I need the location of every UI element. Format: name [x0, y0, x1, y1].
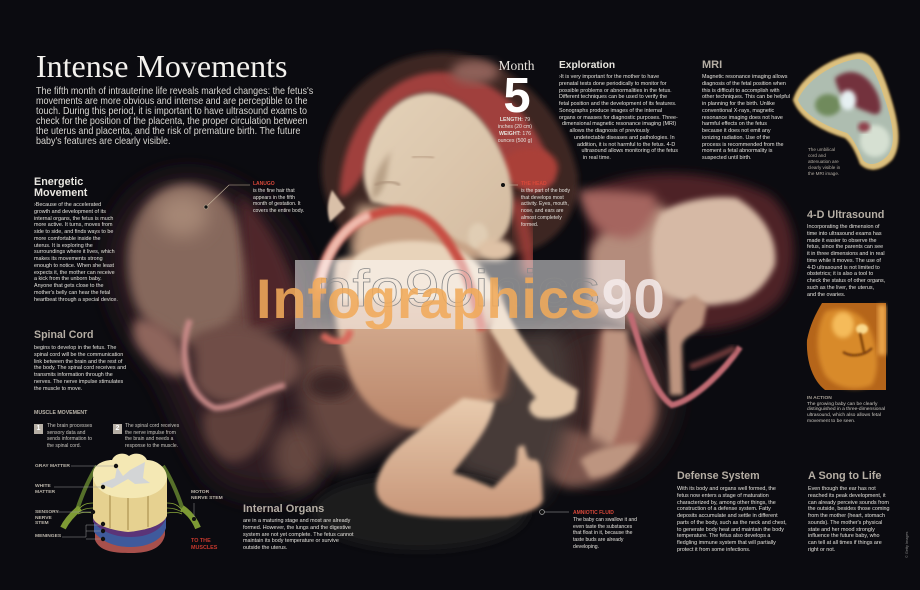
text: THE HEAD [521, 181, 547, 187]
label: to the muscles [191, 538, 218, 551]
body text: uterus. It is exploring the [34, 242, 93, 248]
text: covers the entire body. [253, 208, 304, 214]
body text: in real time. [583, 155, 611, 161]
text: appears in the fifth [253, 194, 295, 200]
body text: resonance imaging does not have [702, 114, 783, 120]
ultrasound caption: distinguished in a three-dimensional [807, 407, 885, 412]
body text: system are not yet complete. The fetus cannot [243, 532, 353, 538]
text: formed. [521, 222, 538, 228]
heading: 4-D Ultrasound [807, 209, 884, 221]
body text: obstetrics; it is also a tool to [807, 271, 873, 277]
label: white matter: WHITE [35, 484, 51, 489]
body text: such as the liver, the uterus, [807, 285, 874, 291]
body text: in planning for the birth. Unlike [702, 101, 775, 107]
body text: transmits information through the [34, 372, 113, 378]
body text [559, 74, 678, 161]
leader lines [54, 466, 194, 539]
body text: makes its movements strong [34, 256, 103, 262]
body text: Different techniques can be used to verify the [559, 94, 667, 100]
body text: more comfortable inside the [34, 236, 101, 242]
body text: this is difficult to accomplish with [702, 88, 780, 94]
step text: the brain and needs a [125, 436, 173, 442]
body text [702, 74, 790, 161]
body text [243, 518, 354, 551]
step text [47, 423, 92, 449]
label: white matter: MATTER [35, 490, 55, 495]
step 1 [34, 423, 92, 449]
body text: right or not. [808, 547, 835, 553]
panel: exploration [559, 60, 678, 161]
body text: maintain its body temperature or survive [243, 538, 339, 544]
label: motor nerve stem: NERVE STEM [191, 496, 223, 501]
ultrasound caption: movement to be seen. [807, 419, 855, 424]
step text [125, 423, 180, 449]
body text: spinal cord will be the communication [34, 352, 123, 358]
intro paragraph: touch. During this period, it is important to have ultrasound exams to [36, 106, 307, 117]
label: motor nerve stem: MOTOR [191, 490, 209, 495]
white matter column [93, 478, 167, 532]
text: almost completely [521, 215, 562, 221]
body text [808, 486, 890, 553]
body text: time into ultrasound exams has [807, 231, 882, 237]
watermark text: Infographics90 [256, 267, 666, 330]
measurements: WEIGHT: 176 [499, 131, 531, 137]
markers [114, 464, 118, 468]
intro paragraph: movements are more obvious and intense and are perceptible to the [36, 96, 308, 107]
body text: the muscle to move. [34, 386, 82, 392]
watermark band [295, 260, 625, 329]
body text: and the ovaries. [807, 292, 845, 298]
MRI caption: The umbilical [808, 147, 835, 152]
intro paragraph: baby's features are clearly visible. [36, 136, 170, 147]
body text: characterized by, among other things, the [677, 500, 776, 506]
MRI caption: the MRI image. [808, 171, 839, 176]
body text: sounds). The mother's physical [808, 520, 882, 526]
body text: diagnosis of the fetal position when [702, 81, 786, 87]
step text: response to the muscle. [125, 443, 178, 449]
right fetus [530, 174, 794, 487]
body text: link between the brain and the rest of [34, 358, 122, 364]
text: LANUGO [253, 181, 275, 187]
panel: a song to life [808, 470, 890, 553]
intro paragraph: check for the position of the placenta, the proper circulation between [36, 116, 308, 127]
body text: reached its peak development, it [808, 493, 886, 499]
body text: fledgling immune system that will partially [677, 540, 776, 546]
body text: it in three dimensions and in real [807, 251, 885, 257]
body text: can already perceive sounds from [808, 500, 889, 506]
ultrasound caption: IN ACTION [807, 396, 832, 401]
heading: Internal Organs [243, 503, 324, 515]
body text: time while it moves. The use of [807, 258, 881, 264]
body text: Anyone that gets close to the [34, 283, 104, 289]
body text: possible problems or abnormalities in the fetus. [559, 88, 672, 94]
MRI caption: cord and [808, 153, 826, 158]
heading: muscle movement: MUSCLE MOVEMENT [34, 410, 87, 416]
body text: fetus now enters a stage of maturation [677, 493, 769, 499]
heading: Energetic [34, 176, 83, 188]
body text: ›It is very important for the mother to have [559, 74, 659, 80]
body text: conventional X-rays, magnetic [702, 108, 774, 114]
ultrasound caption: The growing baby can be clearly [807, 402, 877, 407]
body text: outside the uterus. [243, 545, 287, 551]
step text: the spinal cord. [47, 443, 81, 449]
measurements: LENGTH: 79 [500, 117, 530, 123]
panel: defense system [677, 470, 787, 553]
body text: heartbeat through a special device. [34, 296, 118, 302]
text: The baby can swallow it and [573, 517, 637, 523]
ultrasound caption [807, 396, 885, 424]
label: to the muscles: TO THE [191, 538, 211, 544]
intro paragraph [36, 86, 313, 147]
body text: Even though the ear has not [808, 486, 876, 492]
body text: begins to develop in the fetus. The [34, 345, 116, 351]
intro paragraph: the uterus and placenta, and the risk of premature birth. The future [36, 126, 300, 137]
label: to the muscles: MUSCLES [191, 545, 217, 551]
title: Intense Movements [36, 48, 288, 84]
body text: formed. However, the lungs and the digestive [243, 525, 351, 531]
body text: harmful effects on the fetus [702, 121, 767, 127]
body text: a kick from the unborn baby. [34, 276, 102, 282]
measurements [498, 117, 532, 144]
label: motor nerve stem [191, 490, 223, 501]
body text: side to side, and finds ways to be [34, 229, 113, 235]
label: sensory nerve stem: STEM [35, 521, 49, 526]
step text: The spinal cord receives [125, 423, 179, 429]
body text: made it easier to observe the [807, 238, 877, 244]
body text: surroundings where it lives, which [34, 249, 115, 255]
body text: nerves. The nerve impulse stimulates [34, 379, 123, 385]
body text: influence the future baby, who [808, 533, 880, 539]
nerve roots [63, 466, 198, 528]
MRI caption: attenuation are [808, 159, 839, 164]
month label: Month [498, 58, 534, 73]
measurements: inches (20 cm) [498, 124, 532, 130]
number 5: 5 [503, 69, 531, 123]
text: taste buds are already [573, 537, 623, 543]
heading: Exploration [559, 60, 615, 71]
heading: A Song to Life [808, 470, 881, 482]
panel: 4-D ultrasound [807, 209, 885, 298]
ultrasound caption: ultrasound, which also allows fetal [807, 413, 881, 418]
body text: fetal position and the development of its features. [559, 101, 676, 107]
body text: Sonographs produce images of the internal [559, 108, 662, 114]
MRI caption: clearly visible in [808, 165, 840, 170]
label: white matter [35, 484, 55, 495]
center fetus body [300, 93, 578, 550]
body text: undetectable diseases and pathologies. In [574, 135, 675, 141]
text: that float in it, because the [573, 530, 632, 536]
step text: sensory data and [47, 430, 85, 436]
body text: other techniques. This can be helpful [702, 94, 790, 100]
text: month of gestation. It [253, 201, 301, 207]
text: nose, and ears are [521, 208, 563, 214]
text: AMNIOTIC FLUID [573, 510, 614, 516]
body text: mother's belly can hear the fetal [34, 290, 110, 296]
body text: Magnetic resonance imaging allows [702, 74, 787, 80]
body text: process is recommended from the [702, 142, 784, 148]
credit: © Getty Images [905, 532, 909, 558]
body text: deposits accumulate and settle in different [677, 513, 778, 519]
body text: parts of the body, such as the neck and chest, [677, 520, 787, 526]
body text: state and her mood strongly [808, 526, 875, 532]
panel: energetic movement [34, 176, 118, 302]
body text [677, 486, 787, 553]
text: is the part of the body [521, 188, 570, 194]
body text: allows the diagnosis of previously [569, 128, 650, 134]
body text: temperature. The fetus also develops a [677, 533, 770, 539]
body text: check the status of other organs, [807, 278, 885, 284]
body text: Incorporating the dimension of [807, 224, 880, 230]
body text: the body. The spinal cord receives and [34, 365, 126, 371]
heading: Defense System [677, 470, 760, 482]
heading: MRI [702, 59, 722, 71]
text: that develops most [521, 194, 564, 200]
body text: the outside, besides those coming [808, 506, 890, 512]
body text: ionizing radiation. Use of the [702, 135, 770, 141]
step badge: 2 [116, 425, 119, 432]
text: developing. [573, 544, 599, 550]
body text [807, 224, 885, 298]
center fetus placenta halo [321, 53, 578, 275]
body text [34, 345, 126, 392]
step text: sends information to [47, 436, 92, 442]
left fetus [110, 176, 324, 494]
body text: addition, it is not harmful to the fetus. 4-D [577, 142, 675, 148]
body text: from the mother (heart, stomach [808, 513, 885, 519]
body text: ultrasound allows monitoring of the fetus [581, 148, 678, 154]
text: is the fine hair that [253, 188, 295, 194]
body text: are in a maturing stage and most are already [243, 518, 350, 524]
body text: With its body and organs well formed, the [677, 486, 776, 492]
step badge: 1 [37, 425, 40, 432]
body text: growth and development of its [34, 209, 106, 215]
step text: the nerve impulse from [125, 430, 176, 436]
meninges layers [93, 505, 166, 553]
label: sensory nerve stem [35, 510, 59, 526]
body text: protect it from some infections. [677, 547, 750, 553]
body text [34, 202, 118, 302]
body text: organs or masses for diagnostic purposes. Three- [559, 114, 678, 120]
body text: construction of a defense system. Fatty [677, 506, 771, 512]
body text: 4-D ultrasound is not limited to [807, 264, 880, 270]
body text: can tell at all times if things are [808, 540, 882, 546]
label: meninges: MENINGES [35, 534, 61, 539]
text: activity. Eyes, mouth, [521, 201, 569, 207]
body text: ›Because of the accelerated [34, 202, 101, 208]
intro paragraph: The fifth month of intrauterine life reveals marked changes: the fetus's [36, 86, 313, 97]
step 2 [113, 423, 180, 449]
heading: Movement [34, 187, 87, 199]
body text: prenatal tests done periodically to monitor for [559, 81, 667, 87]
body text: internal organs, the fetus is much [34, 216, 113, 222]
body text: more active. It turns, moves from [34, 222, 112, 228]
body text: fetus, since the parents can see [807, 244, 883, 250]
body text: dimensional magnetic resonance imaging (MRI) [562, 121, 676, 127]
label: sensory nerve stem: SENSORY [35, 510, 59, 515]
panel: MRI [702, 59, 790, 161]
step badge [34, 424, 43, 434]
step text: The brain processes [47, 423, 92, 429]
text: even taste the substances [573, 524, 632, 530]
watermark outline text: Info90inics [300, 260, 600, 318]
label: gray matter: GRAY MATTER [35, 464, 70, 469]
panel: internal organs [243, 503, 354, 551]
body text: enough to notice. When she least [34, 263, 114, 269]
body text: moment a fetal abnormality is [702, 148, 772, 154]
body text: expects it, the mother can receive [34, 270, 115, 276]
heading [34, 176, 88, 199]
measurements: ounces (500 g) [498, 138, 532, 144]
gray matter [100, 462, 150, 488]
body text: because it does not emit any [702, 128, 771, 134]
MRI caption [808, 147, 840, 176]
label: sensory nerve stem: NERVE [35, 516, 52, 521]
month block [498, 58, 534, 144]
heading: Spinal Cord [34, 329, 93, 341]
step badge [113, 424, 122, 434]
body text: to generate body heat and maintain the body [677, 526, 784, 532]
body text: suspected until birth. [702, 155, 751, 161]
panel: spinal cord [34, 329, 126, 392]
